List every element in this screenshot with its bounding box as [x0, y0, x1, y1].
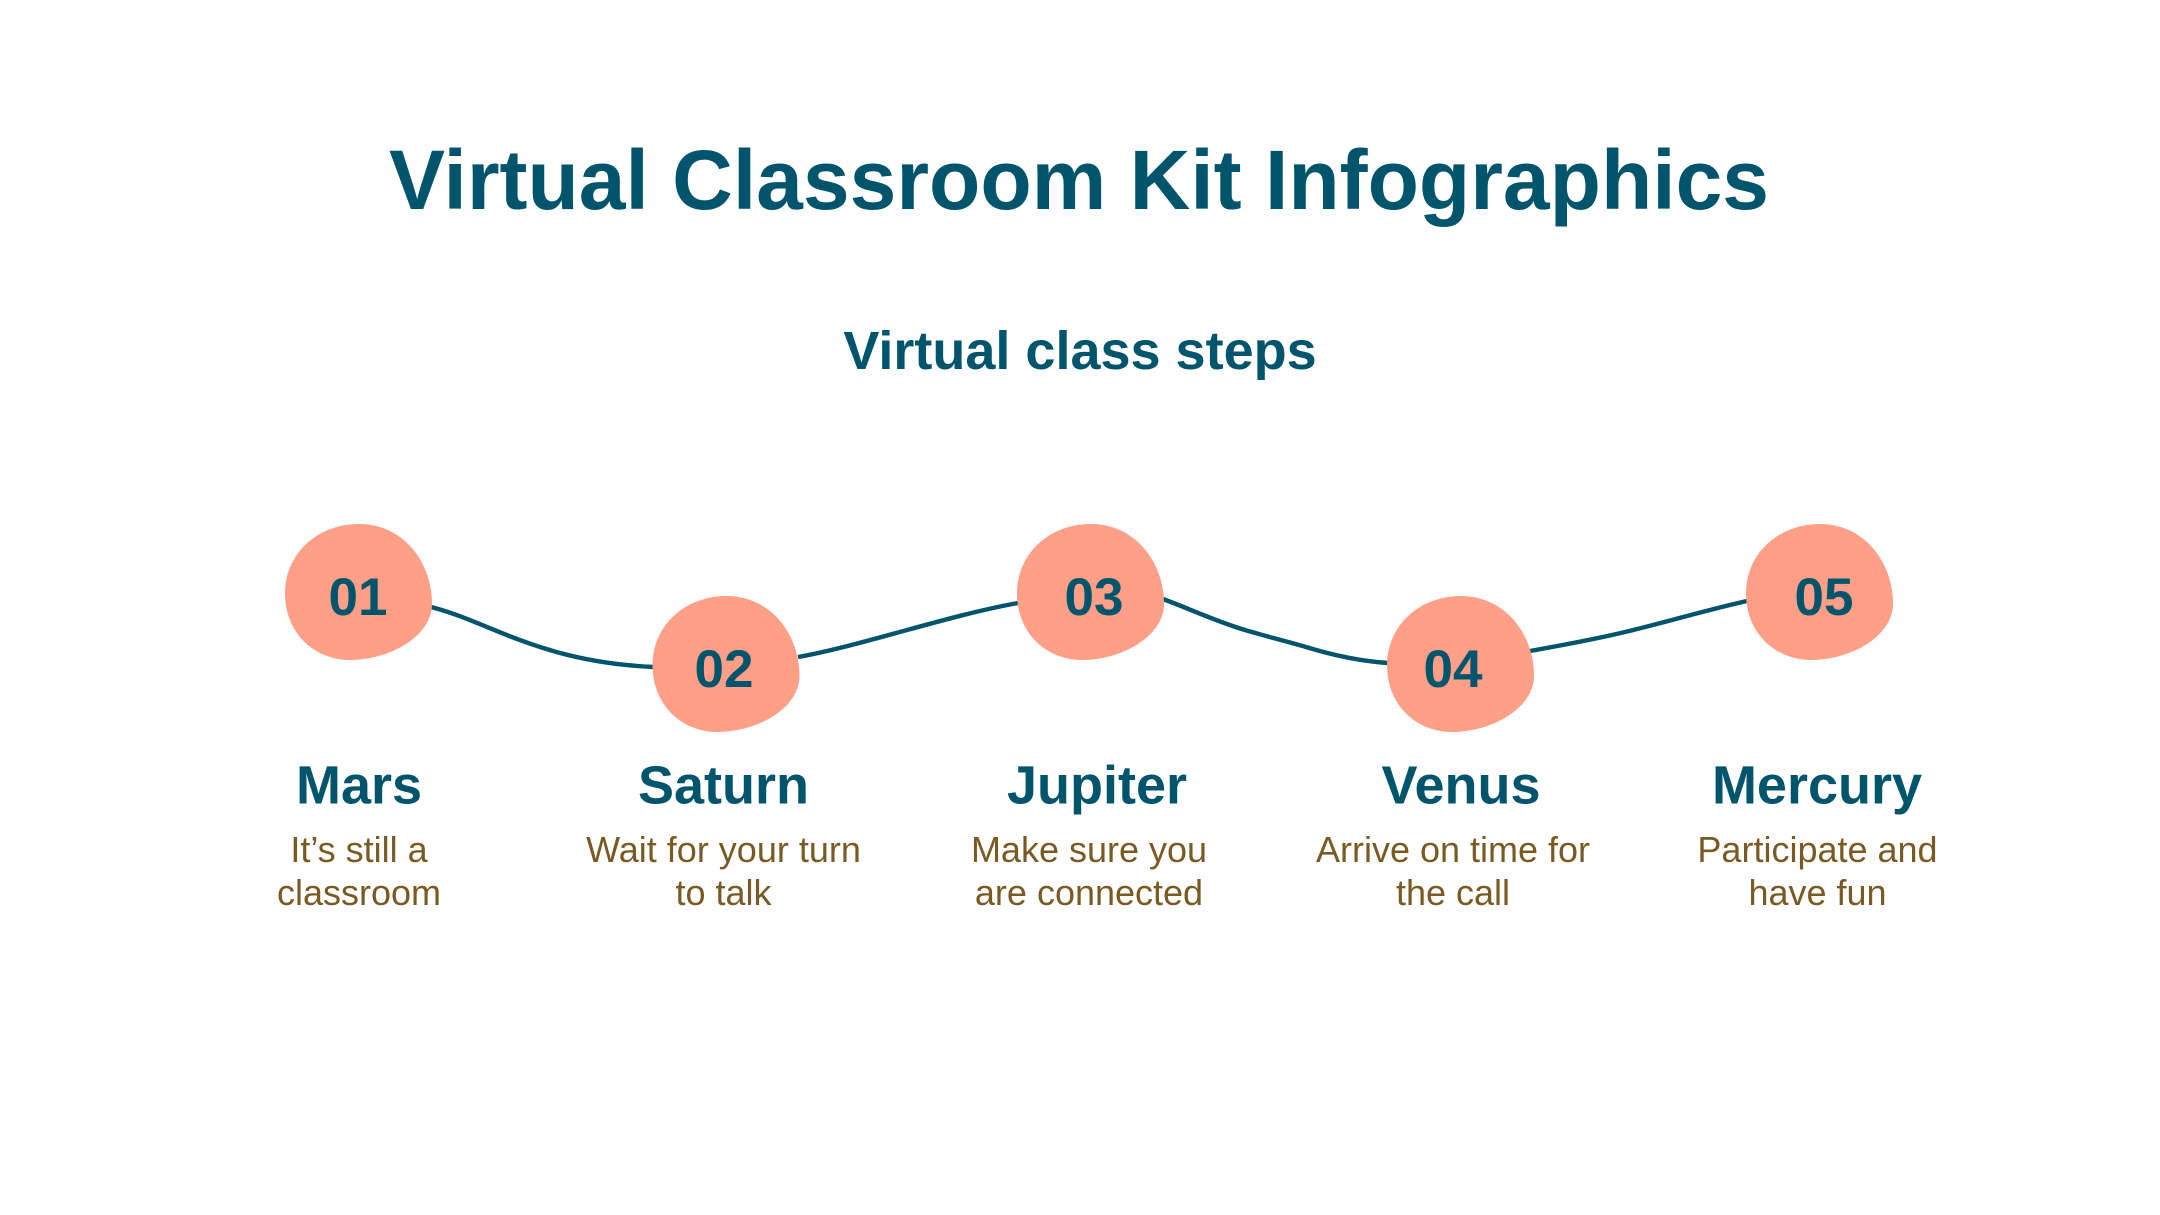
- step 1 badge: [285, 524, 432, 660]
- step 5 badge: 05: [1795, 568, 1853, 627]
- step 4: [1316, 596, 1590, 913]
- step 4 heading: Venus: [1381, 756, 1541, 816]
- step 3: [971, 524, 1207, 913]
- step 5: [1697, 524, 1938, 913]
- step 5 badge: [1746, 524, 1893, 660]
- step 2 heading: Saturn: [638, 756, 809, 816]
- step 3 description: Make sure you: [971, 829, 1207, 870]
- connector: step 4 to 5: [1530, 601, 1747, 651]
- step 2 description: Wait for your turn: [586, 829, 861, 870]
- step 4 description: Arrive on time for: [1316, 829, 1590, 870]
- step 5 description: have fun: [1748, 872, 1887, 913]
- title: Virtual Classroom Kit Infographics: [389, 133, 1769, 227]
- connector: step 2 to 3: [798, 603, 1018, 657]
- step 5 description: Participate and: [1697, 829, 1938, 870]
- step 1 badge: 01: [329, 568, 387, 627]
- step 1 description: It’s still a: [290, 829, 429, 870]
- connector: step 1 to 2: [431, 607, 654, 667]
- step 3 badge: 03: [1065, 568, 1123, 627]
- connector: step 3 to 4: [1163, 599, 1388, 663]
- step 4 badge: 04: [1424, 640, 1483, 699]
- step 1 description: classroom: [277, 872, 441, 913]
- step 5 heading: Mercury: [1712, 756, 1922, 816]
- step 2 description: to talk: [675, 872, 773, 913]
- subtitle: Virtual class steps: [843, 321, 1317, 381]
- step 3 heading: Jupiter: [1007, 756, 1187, 816]
- step 2 badge: 02: [695, 640, 753, 699]
- step 4 description: the call: [1396, 872, 1510, 913]
- step 3 badge: [1017, 524, 1164, 660]
- step 4 badge: [1387, 596, 1534, 732]
- step 2: [586, 596, 861, 913]
- step 2 badge: [652, 596, 800, 732]
- step 1: [277, 524, 441, 913]
- step 1 heading: Mars: [296, 756, 422, 816]
- step 3 description: are connected: [975, 872, 1203, 913]
